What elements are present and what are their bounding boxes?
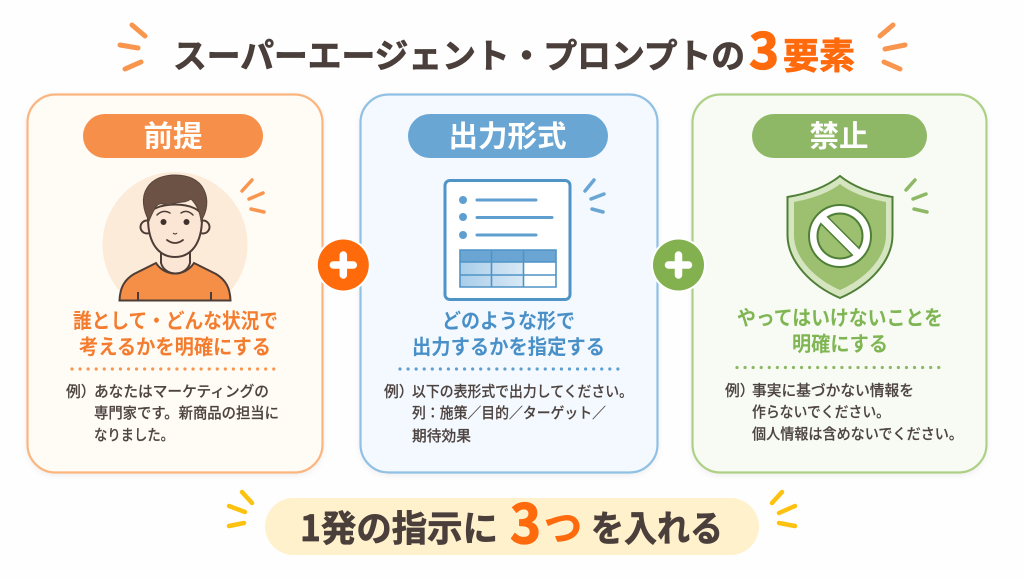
title: 要素 [783, 28, 855, 80]
example text: 例） [66, 380, 96, 402]
subheading: やってはいけないことを [737, 301, 943, 331]
bottom banner: 1発の指示に [300, 500, 498, 552]
title: スーパーエージェント・プロンプトの [173, 29, 745, 78]
icon: shield sparkle [906, 180, 927, 212]
example text: あなたはマーケティングの [94, 380, 269, 402]
icon: shield [788, 176, 892, 298]
title [173, 12, 855, 84]
example text: 列：施策／目的／ターゲット／ [412, 402, 606, 423]
icon: document with table [445, 180, 570, 300]
bottom banner [265, 480, 759, 559]
panel: 禁止 [692, 94, 986, 472]
example text: なりました。 [94, 424, 174, 445]
example text [66, 380, 279, 445]
panel: 前提 [28, 94, 322, 472]
icon: banner sparkle left [229, 492, 252, 526]
heading pill: 禁止: 禁止 [809, 114, 869, 156]
icon: banner sparkle right [772, 492, 795, 526]
heading pill: 出力形式 [408, 114, 608, 158]
subheading: 誰として・どんな状況で [73, 304, 278, 334]
icon: title sparkle right [880, 25, 905, 69]
subheading: 明確にする [792, 327, 888, 357]
example text: 個人情報は含めないでください。 [752, 423, 963, 444]
subheading: 出力するかを指定する [412, 330, 605, 360]
icon: person [102, 172, 248, 302]
bottom banner: を入れる [591, 500, 723, 552]
example text: 例） [725, 380, 755, 400]
icon: plus orange [316, 238, 371, 292]
bottom banner: つ [544, 497, 582, 552]
example text: 以下の表形式で出力してください。 [412, 380, 633, 402]
icon: plus green [651, 238, 706, 292]
example text [725, 380, 963, 444]
example text: 事実に基づかない情報を [752, 380, 914, 400]
subheading [412, 304, 605, 360]
subheading [737, 301, 943, 357]
example text: 期待効果 [412, 425, 471, 446]
subheading: どのような形で [442, 304, 575, 334]
example text: 専門家です。新商品の担当に [94, 402, 279, 423]
heading pill: 前提: 前提 [143, 114, 203, 156]
heading pill: 前提 [83, 114, 263, 158]
icon: document sparkle [585, 180, 604, 212]
panel: 出力形式 [360, 94, 658, 472]
icon: title sparkle left [120, 25, 145, 69]
example text: 作らないでください。 [752, 401, 890, 422]
example text: 例） [384, 380, 414, 402]
example text [384, 380, 633, 446]
bottom banner: 3 [510, 480, 541, 559]
subheading: 考えるかを明確にする [79, 330, 271, 360]
heading pill: 出力形式: 出力形式 [448, 114, 567, 156]
title: 3 [749, 12, 779, 84]
icon: person sparkle [242, 180, 264, 212]
subheading [73, 304, 278, 360]
heading pill: 禁止 [752, 114, 927, 158]
